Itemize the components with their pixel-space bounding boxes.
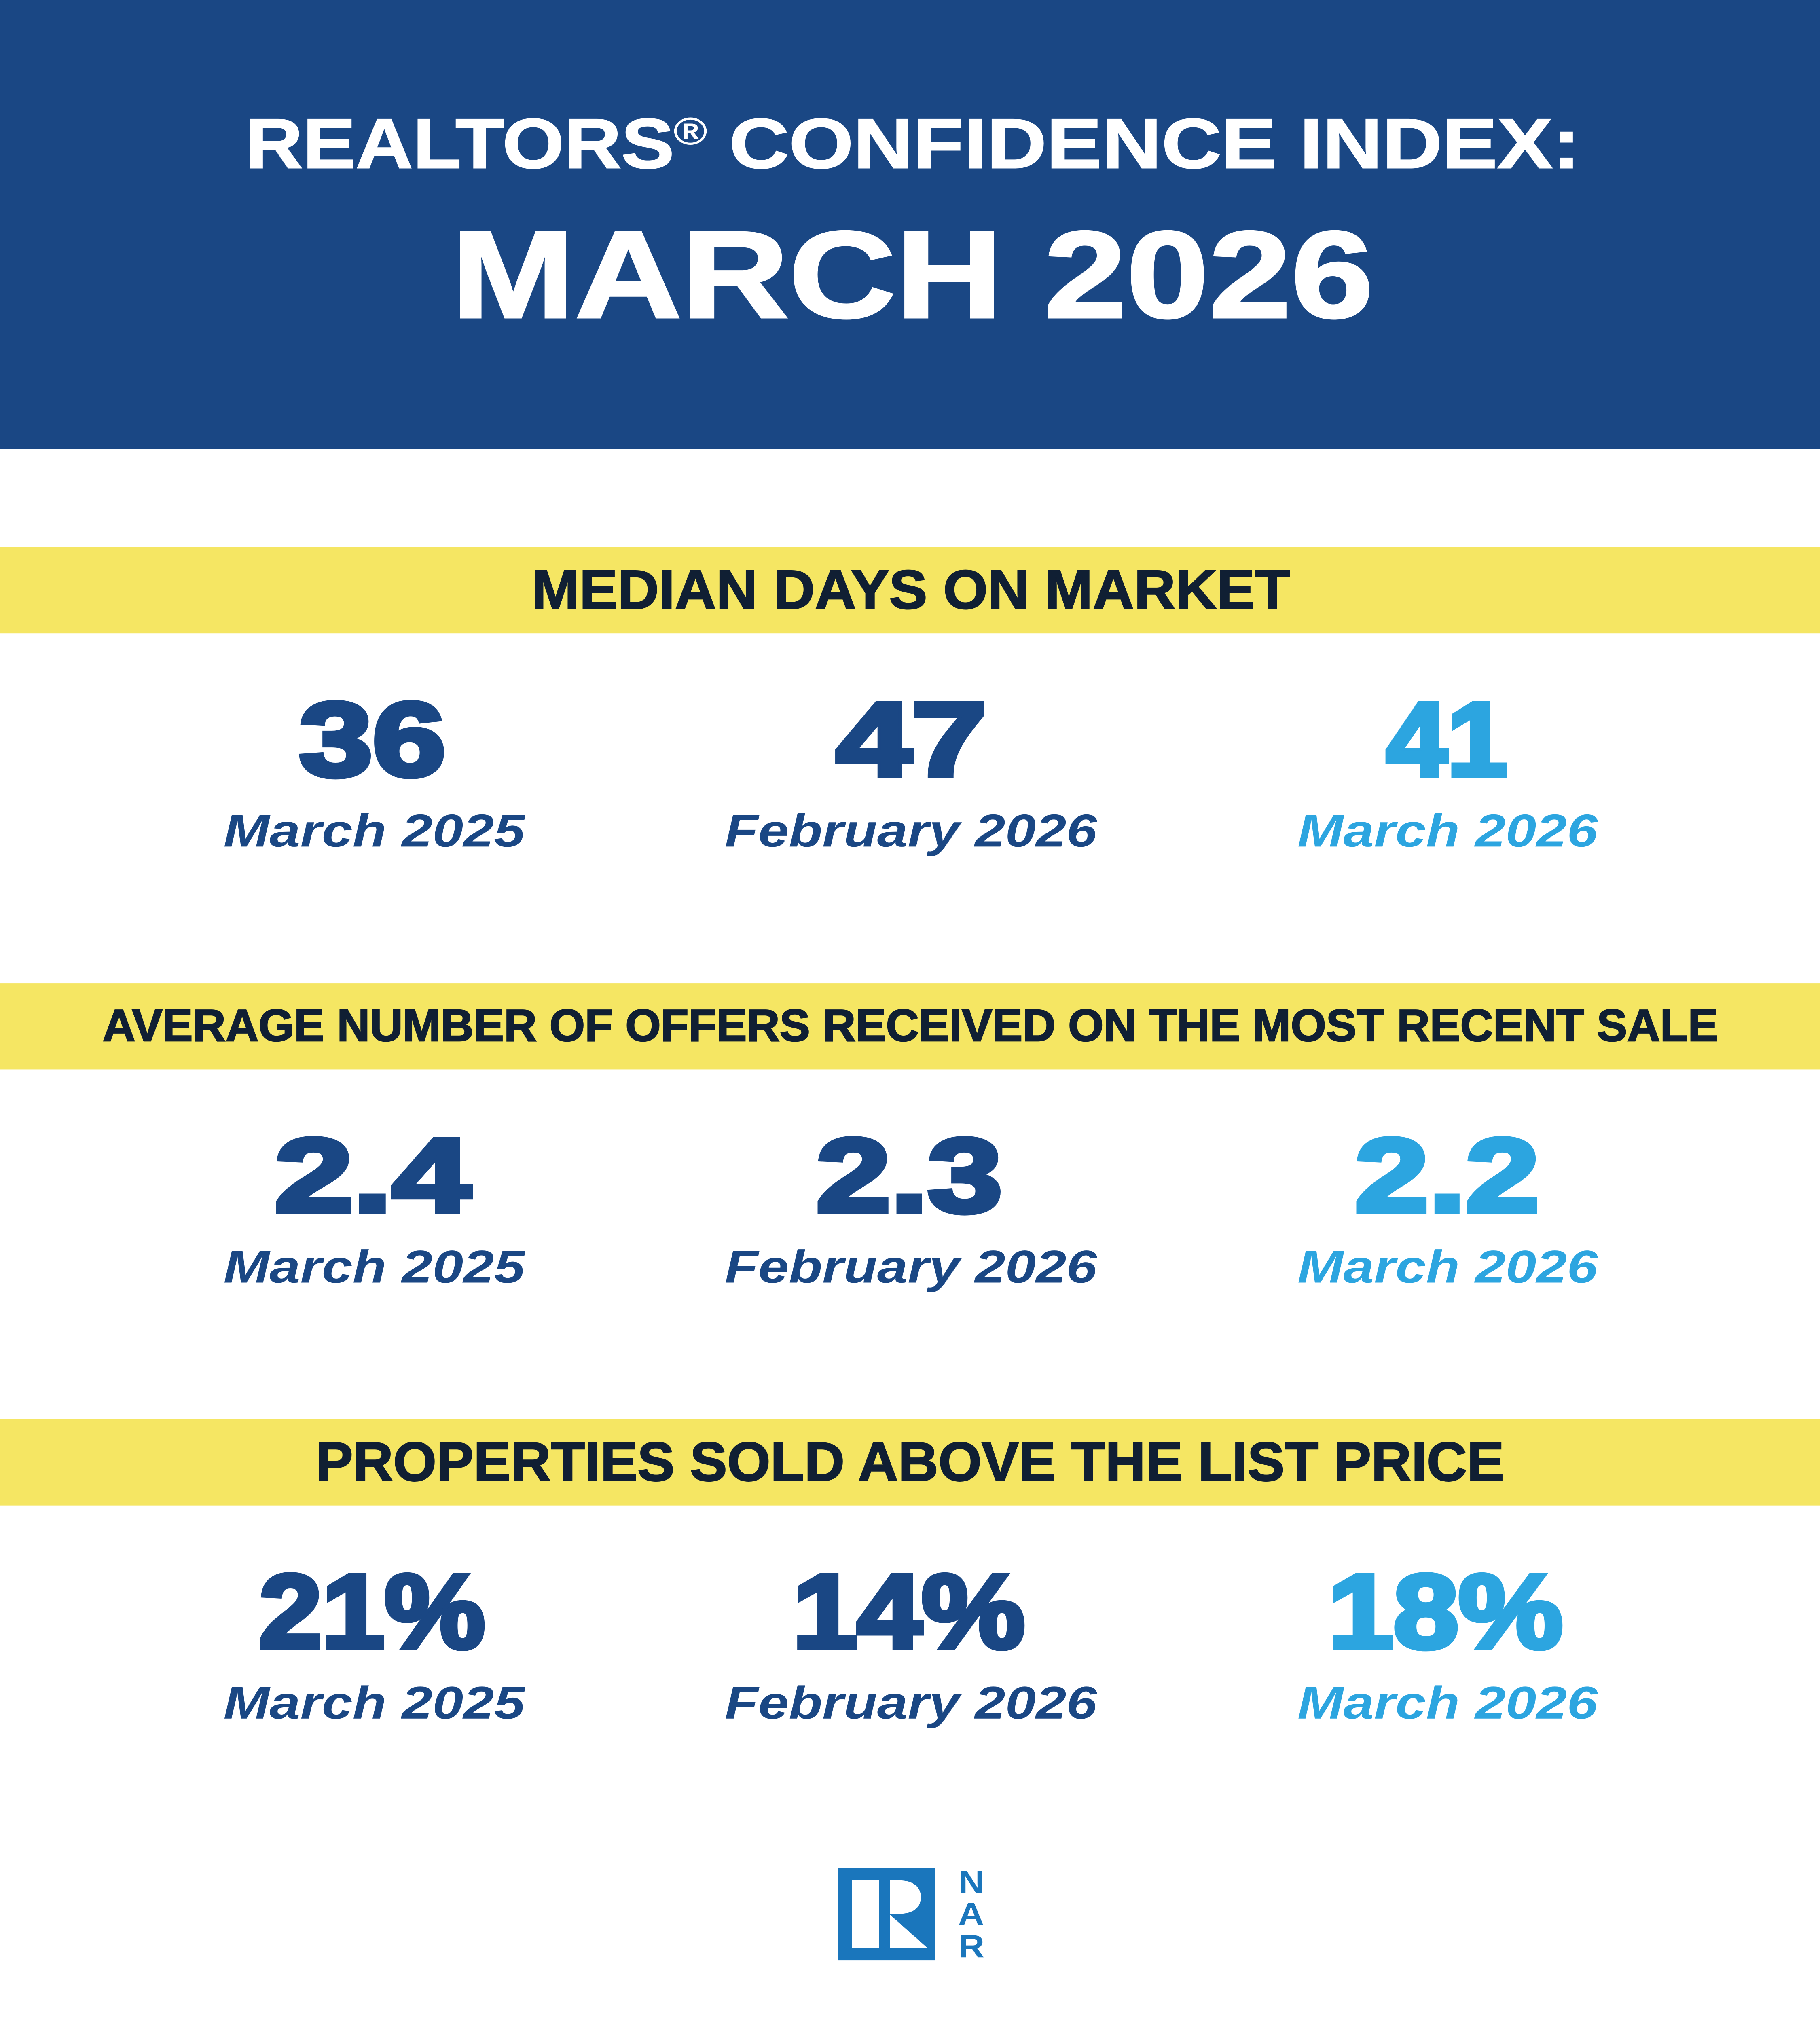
band: median days heading [0, 547, 1820, 633]
wordmark: N A R: A [958, 1896, 984, 1932]
title line: Realtors Confidence Index: ® [673, 110, 707, 153]
stat: 2.2 March 2026 [1297, 1117, 1598, 1292]
title line: March 2026: MARCH 2026 [451, 205, 1373, 344]
stat: 14% February 2026 [725, 1553, 1097, 1728]
icon: block R mark [838, 1868, 935, 1960]
logo: NAR [838, 1864, 984, 1964]
stat: 18% March 2026: 18% [1328, 1553, 1563, 1670]
stat: 2.4 March 2025 [223, 1117, 525, 1292]
stat: 2.3 February 2026 [725, 1117, 1097, 1292]
stat: 18% March 2026: March 2026 [1297, 1677, 1598, 1728]
title line: Realtors Confidence Index: REALTORS [245, 104, 674, 183]
section: median days on market [0, 547, 1820, 857]
stat: 47 February 2026: February 2026 [725, 805, 1097, 857]
stat: 2.2 March 2026: March 2026 [1297, 1241, 1598, 1292]
stat: 2.2 March 2026: 2.2 [1355, 1117, 1539, 1234]
stat: 41 March 2026 [1297, 681, 1598, 857]
header banner [0, 0, 1820, 449]
stat: 36 March 2025: 36 [299, 681, 446, 798]
stat: 14% February 2026: 14% [793, 1553, 1025, 1670]
stat: 47 February 2026 [725, 681, 1097, 857]
stat: 2.4 March 2025: March 2025 [223, 1241, 525, 1292]
stat: 41 March 2026: March 2026 [1297, 805, 1598, 857]
title line: Realtors Confidence Index: CONFIDENCE INDEX: [729, 104, 1580, 183]
section: properties sold above list price [0, 1419, 1820, 1728]
band: list price heading [0, 1419, 1820, 1506]
band: median days heading: MEDIAN DAYS ON MARKET [531, 559, 1290, 620]
title line: Realtors Confidence Index [245, 104, 1580, 183]
stat: 47 February 2026: 47 [836, 681, 987, 798]
section: average number of offers [0, 983, 1820, 1292]
stat: 2.3 February 2026: 2.3 [816, 1117, 1002, 1234]
band: list price heading: PROPERTIES SOLD ABOVE THE LIST PRICE [316, 1431, 1504, 1492]
stat: 21% March 2025: 21% [259, 1553, 485, 1670]
wordmark: N A R [958, 1864, 984, 1964]
stat: 36 March 2025: March 2025 [223, 805, 525, 857]
wordmark: N A R: N [959, 1864, 984, 1900]
stat: 14% February 2026: February 2026 [725, 1677, 1097, 1728]
band: offers heading [0, 983, 1820, 1069]
stat: 2.4 March 2025: 2.4 [275, 1117, 471, 1234]
stat: 36 March 2025 [223, 681, 525, 857]
stat: 21% March 2025: March 2025 [223, 1677, 525, 1728]
stat: 18% March 2026 [1297, 1553, 1598, 1728]
wordmark: N A R: R [959, 1929, 984, 1964]
stat: 41 March 2026: 41 [1386, 681, 1508, 798]
stat: 2.3 February 2026: February 2026 [725, 1241, 1097, 1292]
stat: 21% March 2025 [223, 1553, 525, 1728]
